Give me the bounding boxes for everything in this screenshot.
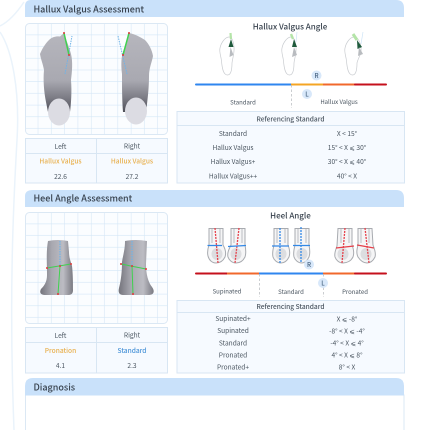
scale bar: [196, 274, 386, 297]
marker L: L: [321, 278, 325, 288]
scale labels: Supinated: [213, 286, 242, 296]
table: heel angle results: Right: [124, 330, 141, 340]
marker R: R: [314, 71, 319, 80]
table: hallux valgus results: 27.2: [126, 171, 139, 181]
scale labels: Standard: [230, 98, 256, 106]
section header: Hallux Valgus Assessment: Hallux Valgus Assessment: [34, 2, 144, 16]
table: heel angle referencing standard: [177, 300, 404, 373]
section header: Hallux Valgus Assessment: [25, 0, 404, 17]
scale labels: [230, 97, 358, 106]
table: hallux valgus results: [26, 138, 168, 183]
panel: diagnosis: [25, 378, 404, 430]
table: hallux valgus referencing standard: [177, 112, 404, 183]
marker R: [312, 70, 322, 80]
table: hallux valgus results: Right: [124, 140, 141, 150]
table: hallux valgus referencing standard: Hallux Valgus++: [209, 170, 258, 180]
table: hallux valgus referencing standard: X < 15°: [337, 128, 358, 138]
marker L: [302, 89, 312, 99]
left heel scan: [40, 240, 73, 295]
scale labels: Hallux Valgus: [320, 97, 358, 106]
right foot scan: [118, 32, 153, 124]
table: hallux valgus referencing standard: Hallux Valgus: [212, 142, 254, 152]
table: heel angle referencing standard: Pronated+: [217, 362, 249, 372]
table: heel angle referencing standard: -8° < X ⩽ -4°: [329, 326, 365, 336]
icon: foot severe hallux valgus: [345, 32, 363, 75]
section header: Diagnosis: Diagnosis: [34, 380, 75, 394]
table: hallux valgus referencing standard: 15° < X ⩽ 30°: [328, 142, 367, 152]
panel: hallux valgus foot scans: [26, 24, 168, 134]
table: hallux valgus results: Hallux Valgus: [111, 156, 153, 166]
icon: foot standard: [220, 33, 234, 75]
icon: foot hallux valgus: [282, 32, 297, 75]
panel: hallux valgus angle: [176, 17, 404, 110]
table: heel angle results: [26, 328, 168, 373]
table: heel angle referencing standard: Pronated: [219, 350, 247, 360]
marker L: [318, 278, 328, 288]
table: heel angle results: Pronation: [45, 345, 76, 355]
chart title: Hallux Valgus Angle: [253, 22, 328, 32]
chart title: Heel Angle: [270, 210, 311, 222]
table: hallux valgus referencing standard: Referencing Standard: [256, 114, 325, 124]
table: heel angle referencing standard: X ⩽ -8°: [337, 314, 358, 324]
marker R: R: [307, 260, 311, 269]
panel: heel angle scans: [26, 212, 168, 324]
table: heel angle results: Standard: [118, 345, 146, 355]
section header: Diagnosis: [25, 378, 404, 396]
icon: standard heels: [272, 227, 310, 263]
left foot scan: [40, 32, 72, 126]
table: heel angle results: 2.3: [127, 360, 137, 370]
table: heel angle results: Left: [55, 330, 67, 340]
table: hallux valgus results: 22.6: [54, 171, 67, 181]
scale labels: Standard: [278, 287, 304, 296]
right heel scan: [119, 240, 154, 295]
section header: Heel Angle Assessment: [25, 190, 404, 207]
icon: pronated heels: [335, 228, 375, 263]
table: hallux valgus referencing standard: 30° < X ⩽ 40°: [328, 156, 367, 166]
panel: heel angle chart: [176, 207, 404, 299]
table: hallux valgus results: Hallux Valgus: [39, 156, 82, 166]
scale labels: Pronated: [342, 287, 368, 296]
table: heel angle referencing standard: -4° < X ⩽ 4°: [330, 338, 364, 348]
table: heel angle referencing standard: 4° < X ⩽ 8°: [331, 350, 363, 360]
marker L: L: [305, 90, 309, 98]
scale labels: [213, 286, 368, 296]
scale bar: [196, 84, 386, 108]
section header: Heel Angle Assessment: Heel Angle Assessment: [34, 192, 133, 204]
table: heel angle referencing standard: Referencing Standard: [256, 301, 325, 311]
table: hallux valgus referencing standard: Standard: [219, 128, 247, 138]
icon: supinated heels: [208, 228, 246, 263]
table: heel angle referencing standard: Standard: [219, 338, 247, 348]
table: hallux valgus referencing standard: 40° < X: [337, 170, 357, 180]
table: heel angle referencing standard: Supinated: [217, 325, 249, 335]
table: hallux valgus referencing standard: Hallux Valgus+: [211, 156, 256, 166]
marker R: [304, 260, 314, 270]
table: heel angle referencing standard: Supinated+: [215, 313, 251, 323]
background body silhouette: [0, 2, 92, 430]
table: hallux valgus results: Left: [55, 141, 67, 151]
table: heel angle results: 4.1: [56, 360, 65, 370]
table: heel angle referencing standard: 8° < X: [339, 362, 355, 372]
